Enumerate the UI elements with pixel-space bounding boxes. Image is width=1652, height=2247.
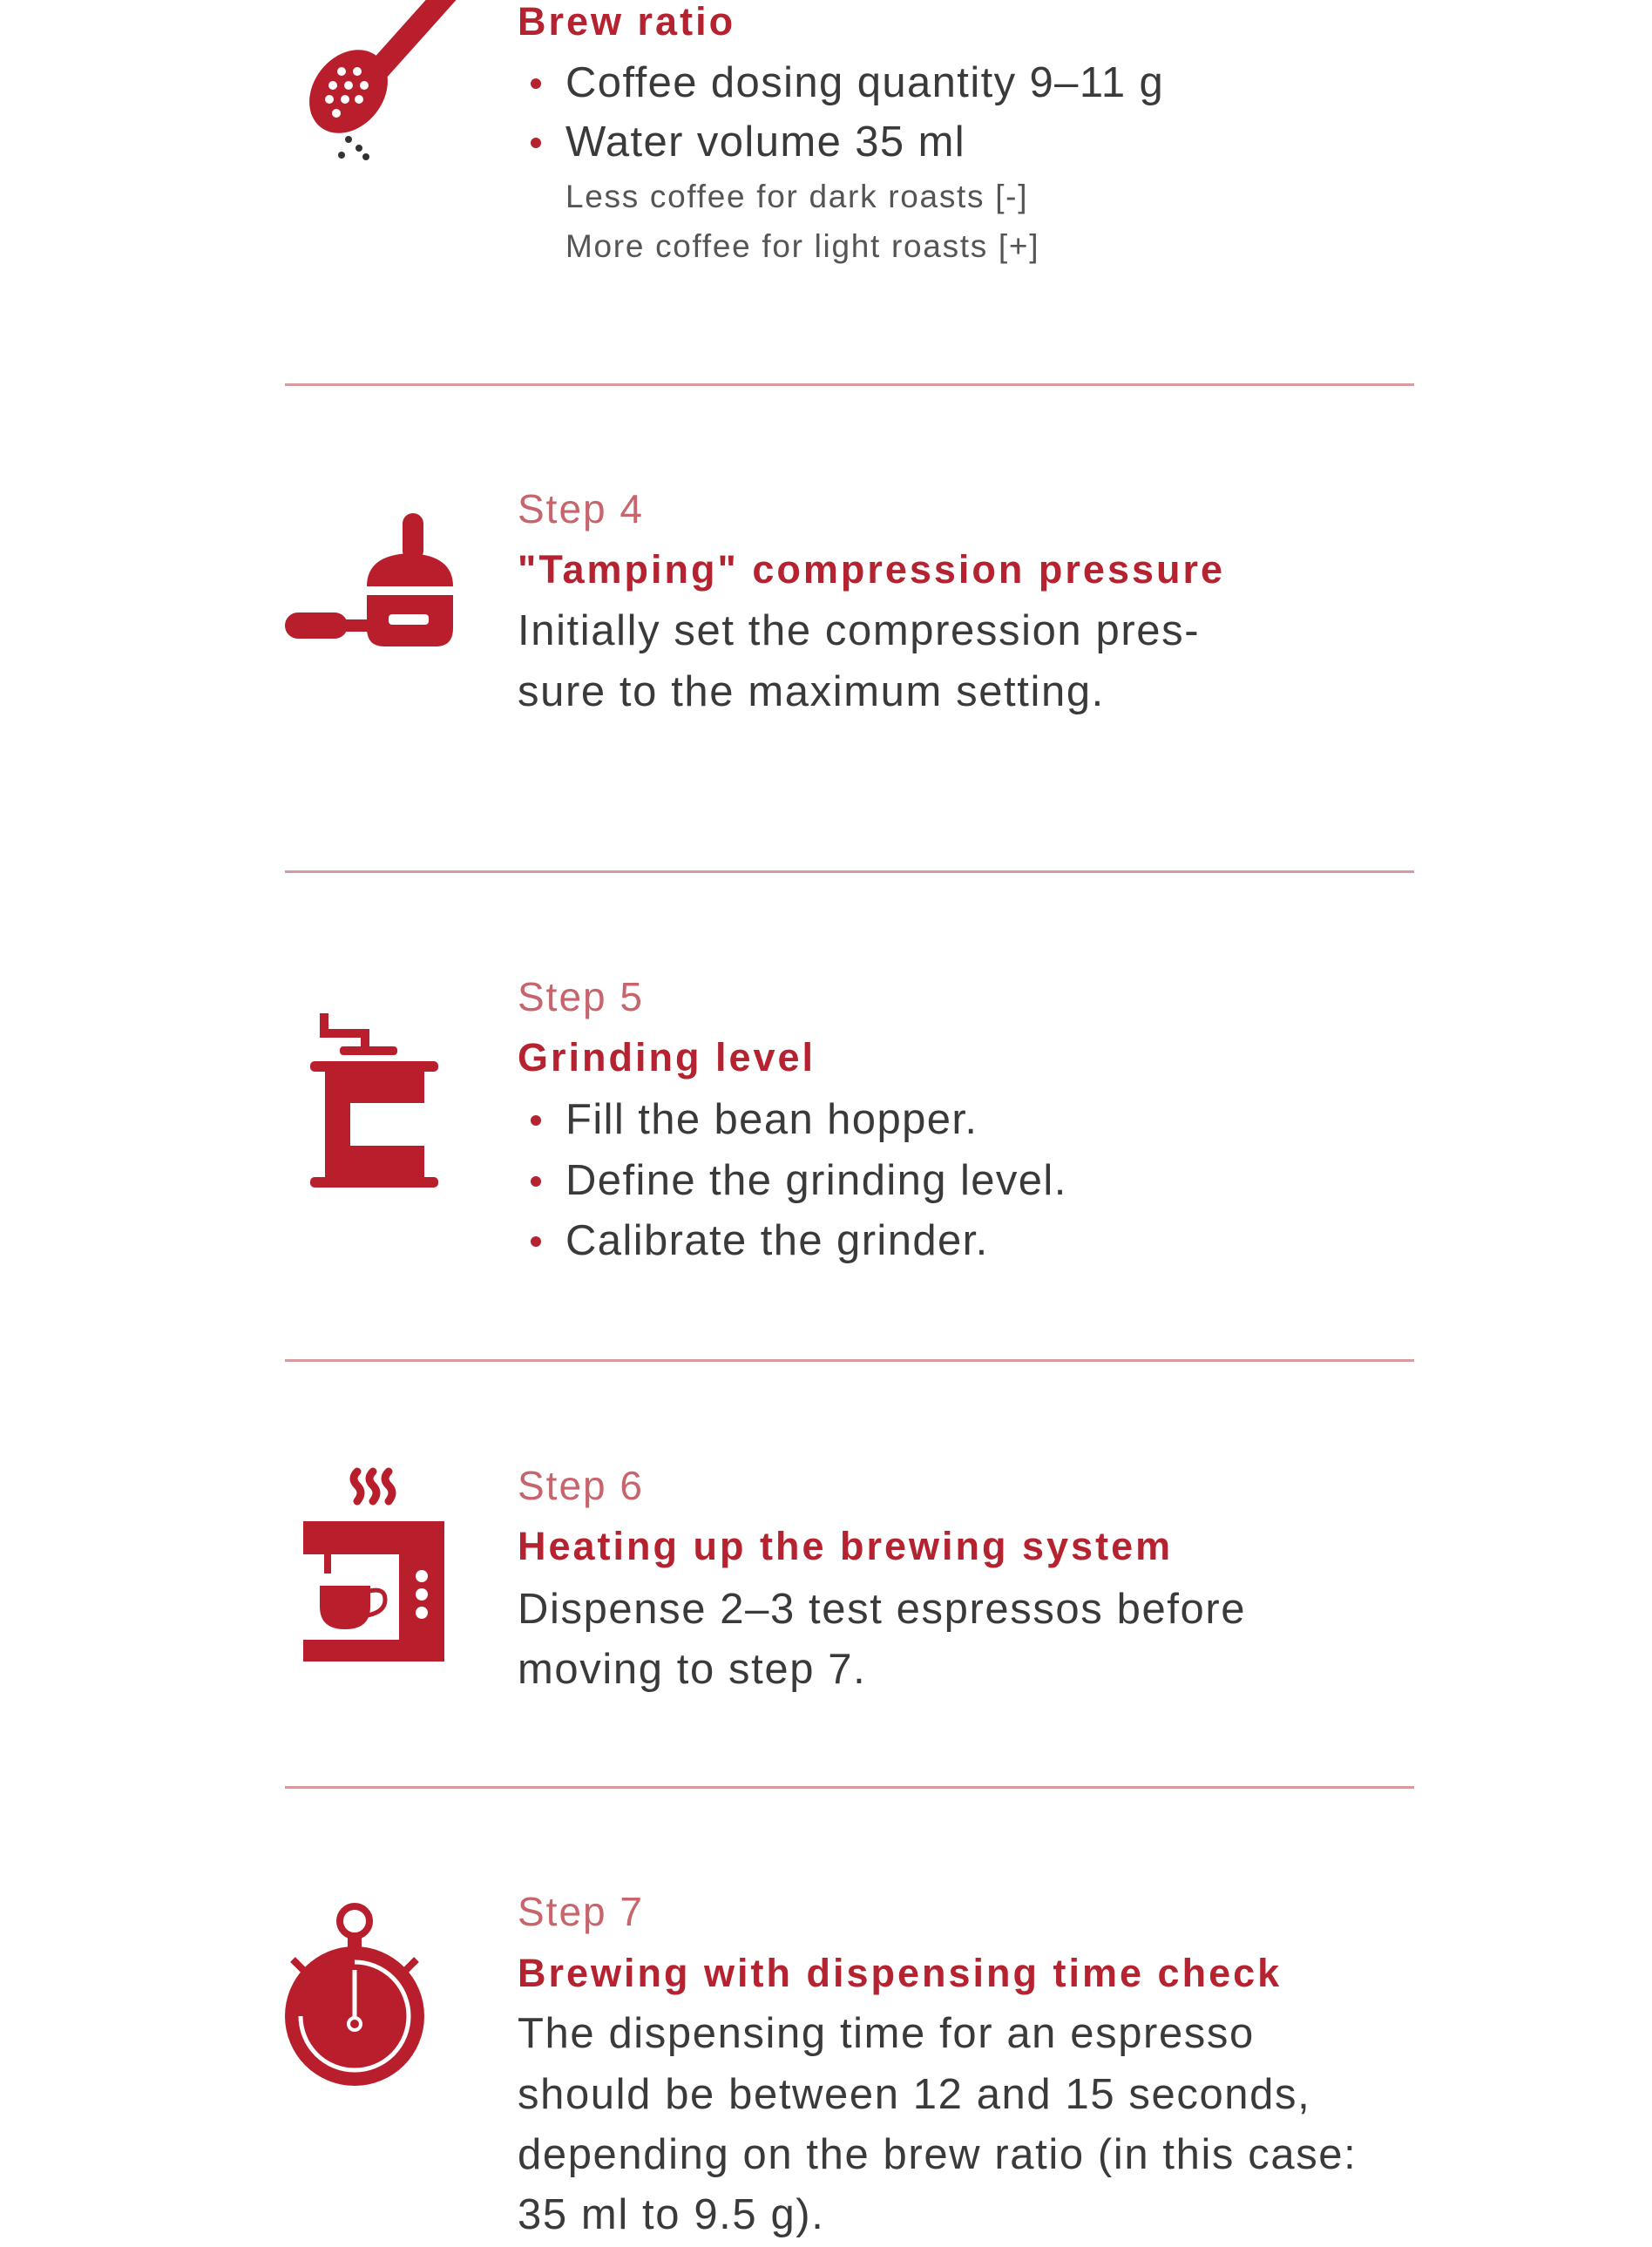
step 4 text: sure to the maximum setting. (518, 668, 1105, 715)
step 7 text: The dispensing time for an espresso (518, 2010, 1255, 2057)
icon: coffee grinder (310, 1013, 438, 1188)
step 6 text (518, 1463, 1246, 1693)
step 4 text: "Tamping" compression pressure (518, 547, 1225, 592)
step 4 text: Initially set the compression pres- (518, 607, 1200, 654)
step 6 text: moving to step 7. (518, 1646, 866, 1693)
step 7 text (518, 1889, 1357, 2238)
step 4 text (518, 486, 1225, 715)
step 5 text: Step 5 (518, 974, 644, 1019)
step 5 text: Define the grinding level. (565, 1157, 1067, 1204)
step 5 text: Fill the bean hopper. (565, 1096, 978, 1143)
list: brew ratio (531, 59, 1164, 264)
step 7 text: Brewing with dispensing time check (518, 1951, 1282, 1995)
icon: espresso machine (303, 1467, 444, 1662)
heading: brew ratio: Brew ratio (518, 0, 735, 44)
step 7 text: 35 ml to 9.5 g). (518, 2191, 824, 2238)
step 5 text: Calibrate the grinder. (565, 1217, 989, 1264)
step 6 text: Step 6 (518, 1463, 644, 1508)
list: brew ratio: Coffee dosing quantity 9–11 g (565, 59, 1164, 106)
list: brew ratio: More coffee for light roasts [+] (565, 228, 1039, 264)
icon: coffee spoon (309, 0, 457, 160)
list: brew ratio: Less coffee for dark roasts [-] (565, 179, 1028, 214)
step 7 text: should be between 12 and 15 seconds, (518, 2071, 1310, 2118)
icon: tamper and portafilter (285, 513, 453, 646)
step 6 text: Heating up the brewing system (518, 1524, 1173, 1568)
step 6 text: Dispense 2–3 test espressos before (518, 1586, 1246, 1633)
step 7 text: Step 7 (518, 1889, 644, 1934)
step 4 text: Step 4 (518, 486, 644, 531)
step 7 text: depending on the brew ratio (in this case: (518, 2131, 1357, 2178)
step 5 text: Grinding level (518, 1035, 816, 1080)
list: brew ratio: Water volume 35 ml (565, 118, 965, 166)
step 5 text (518, 974, 1067, 1264)
icon: stopwatch (285, 1903, 424, 2086)
